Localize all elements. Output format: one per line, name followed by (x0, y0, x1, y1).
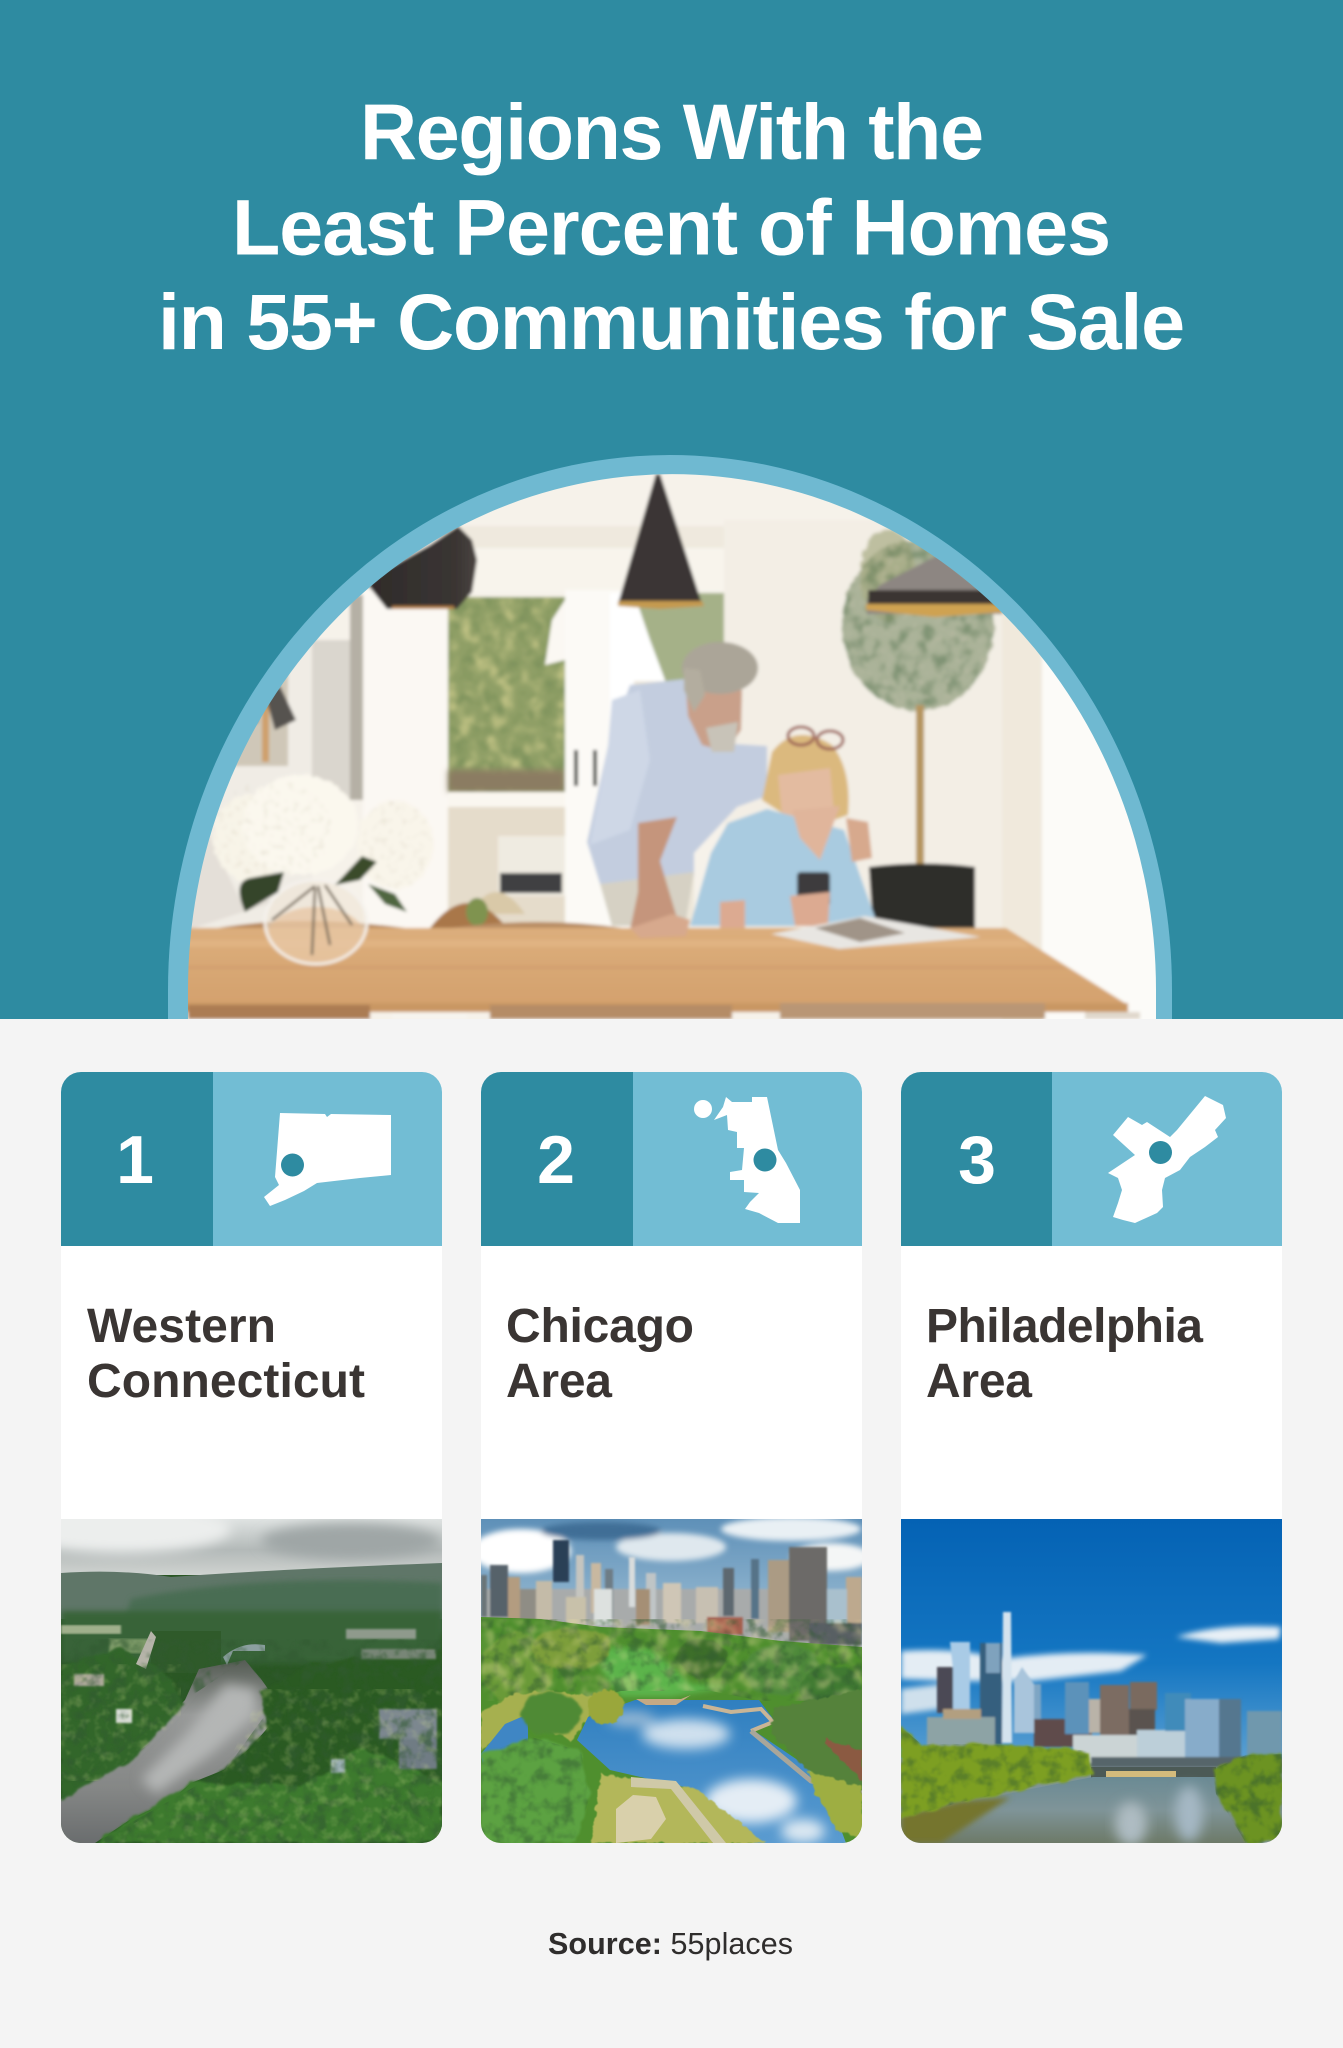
right bank forest (216, 1648, 442, 1842)
park (481, 1617, 862, 1843)
foreground trees (95, 1747, 442, 1843)
left trees (901, 1727, 1093, 1819)
icon: Philadelphia map (1108, 1096, 1226, 1223)
left window (448, 597, 565, 793)
river (901, 1777, 1246, 1843)
table (180, 928, 1128, 1012)
card 1: Western Connecticut (61, 1072, 442, 1843)
chairs (188, 1005, 370, 1019)
centre door (562, 592, 610, 926)
card 2 body (481, 1072, 862, 1843)
card 1 name (87, 1300, 365, 1408)
skyline (927, 1612, 1282, 1767)
left door frame (363, 590, 448, 928)
card 2 name: Area (506, 1355, 612, 1408)
bridge (223, 1644, 265, 1665)
card 3 name (926, 1300, 1203, 1408)
magazine (771, 916, 981, 949)
centre lamp (618, 474, 702, 604)
woman figure (690, 727, 878, 930)
photo: Philadelphia skyline and river (901, 1519, 1282, 1846)
card 2 header light (633, 1072, 862, 1246)
pavilion (616, 1795, 666, 1843)
island (521, 1692, 581, 1736)
rank 3: 3 (958, 1122, 996, 1198)
card 1 rank panel (61, 1072, 213, 1246)
hero photo: couple at dining table (180, 470, 1172, 1030)
lake (481, 1716, 528, 1764)
hand on table (630, 914, 690, 938)
right trees (1213, 1754, 1282, 1843)
right shore (771, 1689, 862, 1794)
photo: Chicago skyline and lake (471, 1517, 871, 1843)
card 3 name: Area (926, 1355, 1032, 1408)
card 3 name: Philadelphia (926, 1300, 1203, 1353)
river (61, 1660, 276, 1843)
rank 1: 1 (116, 1122, 154, 1198)
card 3 rank panel (901, 1072, 1052, 1246)
left lamp (368, 526, 477, 609)
wall art (236, 675, 290, 768)
photo: Connecticut river town (61, 1519, 442, 1843)
teal header band (0, 0, 1343, 1019)
rank 2: 2 (537, 1122, 575, 1198)
card 3 body (901, 1072, 1282, 1843)
right wall and curtains (724, 520, 1004, 930)
plant (842, 539, 994, 711)
card 2 name: Chicago (506, 1300, 694, 1353)
man figure (587, 642, 767, 930)
foreground shore (591, 1774, 766, 1843)
flowers (212, 775, 433, 889)
card 1 name: Connecticut (87, 1355, 365, 1408)
source line: Source: 55places (548, 1927, 793, 1961)
icon: Connecticut map (264, 1113, 391, 1206)
chair with plant (430, 903, 507, 928)
card 3: Philadelphia Area (901, 1072, 1282, 1846)
boardwalk (636, 1695, 691, 1705)
sofa (192, 838, 268, 928)
bridge (1091, 1767, 1216, 1779)
icon: Chicago map (694, 1097, 800, 1223)
skyline (481, 1540, 862, 1649)
vase (264, 879, 368, 965)
title: Least Percent of Homes (232, 182, 1111, 272)
left bank forest (61, 1649, 183, 1801)
title: in 55+ Communities for Sale (158, 277, 1185, 366)
card 1 header light (213, 1072, 442, 1246)
card 2 name (506, 1300, 694, 1408)
arch ring (168, 455, 1172, 1019)
big tree (481, 1737, 589, 1843)
room walls (188, 474, 1004, 1019)
card 1 name: Western (87, 1300, 276, 1353)
leaves (240, 872, 284, 912)
chair backs behind table (218, 921, 405, 928)
title: Regions With the (360, 87, 984, 176)
foliage texture (61, 1639, 442, 1843)
houses (74, 1629, 437, 1773)
card 2: Chicago Area (471, 1072, 871, 1843)
card 2 rank panel (481, 1072, 633, 1246)
road (136, 1631, 156, 1669)
card 1 body (61, 1072, 442, 1843)
card 3 header light (1052, 1072, 1282, 1246)
title (158, 87, 1185, 366)
right lamp (867, 555, 1002, 614)
